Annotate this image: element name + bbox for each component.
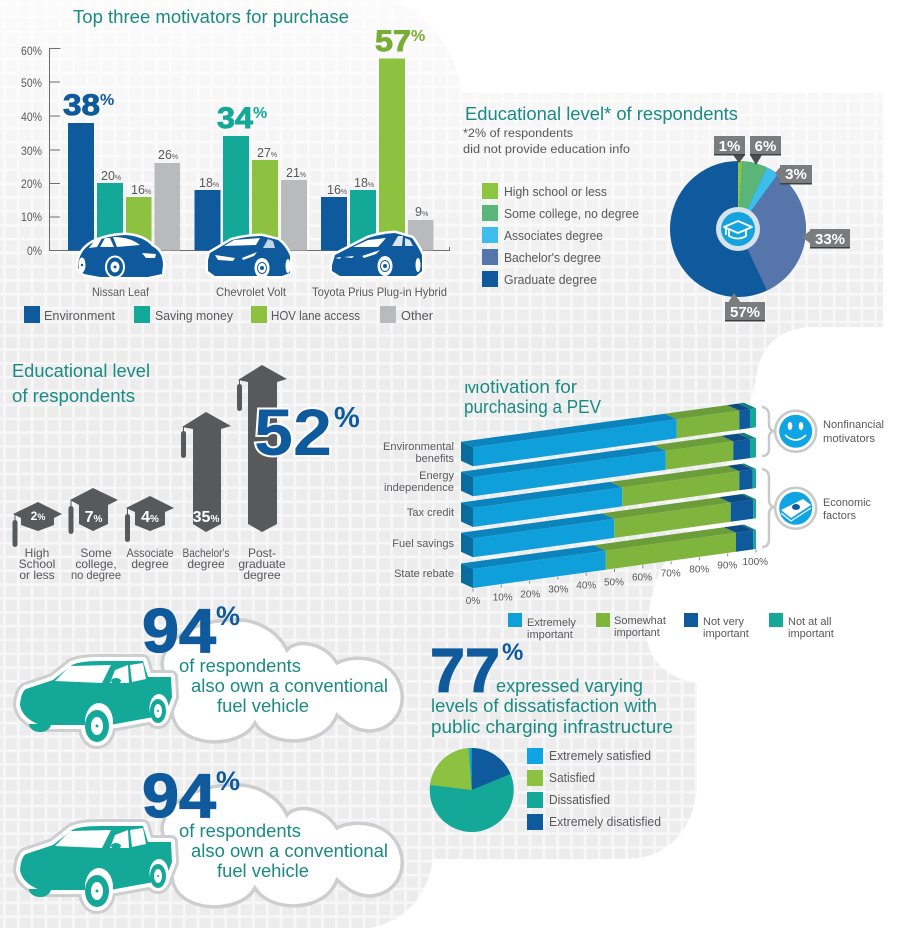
callout: 57% [375,25,425,58]
legend: importance: important [527,629,573,641]
cap labels: degree [243,568,281,582]
panel: motivation for purchasing a PEV [383,377,884,641]
cap labels: School [19,557,55,571]
big number: 94%: 94 [142,762,217,831]
legend: education: High school or less [504,185,607,199]
text: conventional vehicle: fuel vehicle [217,696,309,716]
cap: Bachelor's 35% [181,412,231,532]
row labels: benefits [415,453,454,465]
cap: Post-graduate [237,365,287,532]
row labels: State rebate [394,568,454,580]
bar chart axes: 20% [21,179,42,191]
callout: 38%: 38 [63,89,100,122]
legend: satisfaction [527,748,661,830]
panel: 94% callout one [20,597,402,742]
row labels: Tax credit [407,507,454,519]
percent axis: 100% [743,557,768,568]
callout: 57%: % [411,28,425,45]
big number: 77%: % [502,639,523,666]
footnote [463,128,630,156]
bar chart axes: 60% [21,46,42,58]
bars: Toyota Prius: 18% [354,176,374,190]
heading: educational level of respondents [12,361,150,406]
label: economic factors [823,497,871,522]
cap: Associate 4%: 4% [141,509,159,526]
label: 6%: 6% [755,138,776,155]
icon: smiley [775,411,816,452]
callout: 34%: % [253,105,267,122]
legend: education: Some college, no degree [504,207,639,221]
percent axis: 60% [632,573,652,584]
bars: Chevrolet Volt: 21% [286,166,306,180]
stacked bar: Fuel savings [461,494,756,557]
row labels: Energy [419,470,454,482]
cap labels: Some [80,546,112,560]
row labels: Fuel savings [392,538,454,550]
legend: education: Associates degree [504,229,603,243]
legend: education: Graduate degree [504,273,597,287]
heading: motivation: Motivation for [464,377,577,397]
bars: Chevrolet Volt: 18% [199,176,219,190]
bar chart axes: 10% [21,212,42,224]
heading: educational level of respondents: Educational level [12,361,150,381]
cap labels: degree [187,557,225,571]
cap labels: graduate [238,557,286,571]
heading: educational level of respondents: of respondents [12,386,135,406]
label: nonfinancial motivators: Nonfinancial [823,419,884,431]
callout: 52%: % [334,402,360,434]
text: conventional vehicle: of respondents [179,656,301,676]
stacked bar: Tax credit [461,464,756,527]
bar chart axes: 40% [21,112,42,124]
brace: economic [762,469,775,547]
bars: Chevrolet Volt: 27% [257,146,277,160]
bar chart axes [21,46,450,258]
text: conventional vehicle [179,821,388,881]
cap labels: degree [131,557,169,571]
legend: importance: important [788,628,834,640]
cap: Associate 4% [125,496,174,542]
label: 1%: 1% [719,138,740,155]
bars: Nissan Leaf: 20% [101,169,121,183]
legend: motivators: Saving money [155,309,234,323]
heading: motivation [463,377,601,417]
bar chart axes: 30% [21,146,42,158]
label: economic factors: Economic [823,497,871,509]
bars: Toyota Prius [321,58,434,250]
label: 33%: 33% [815,231,845,248]
legend: importance: important [614,627,660,639]
pie chart: satisfaction [430,748,514,832]
text: dissatisfaction: expressed varying [496,676,643,696]
pie chart: education [670,161,806,297]
title: top three motivators: Top three motivators for purchase [73,7,349,27]
big number: 94%: % [216,601,240,631]
cap: High school 2%: 2% [31,509,45,523]
legend: motivators [24,306,433,323]
cloud [162,785,402,907]
icon: pickup truck [20,661,172,742]
cap labels: Post- [248,546,276,560]
label: economic factors: factors [823,510,856,522]
percent axis: 30% [548,585,568,596]
text: conventional vehicle: also own a conventional [191,841,388,861]
cap: Bachelor's 35%: 35% [193,509,219,526]
panel: top three motivators [21,7,450,323]
bars: Nissan Leaf: 26% [158,148,178,162]
bars: Toyota Prius: 9% [415,205,428,219]
legend: satisfaction: Dissatisfied [549,793,610,807]
panel: 94% callout two [20,762,402,907]
cloud [162,620,402,742]
legend: importance: Extremely [527,617,576,629]
percent axis: 80% [689,565,709,576]
cap labels: or less [19,568,55,582]
panel: 77% dissatisfaction [430,637,673,832]
bar chart axes: 0% [27,246,42,258]
label: 3% [775,165,812,184]
stacked bar: Environmental benefits [461,403,756,466]
callout: 38%: % [100,92,114,109]
text: dissatisfaction: public charging infrastructure [431,717,673,737]
percent axis [466,550,768,607]
text: conventional vehicle: fuel vehicle [217,861,309,881]
text: conventional vehicle: also own a conventional [191,676,388,696]
cap labels: Associate [126,546,174,560]
big number: 94%: % [216,766,240,796]
text: dissatisfaction: levels of dissatisfaction with [431,696,657,716]
legend: importance: Not at all [788,616,831,628]
callout: 34%: 34 [217,102,253,135]
percent axis: 50% [604,577,624,588]
cap labels: college, [75,557,117,571]
label: 57%: 57% [730,304,760,321]
row labels [383,441,454,580]
icon: graduation cap [724,221,752,238]
bar chart axes: 50% [21,78,42,90]
legend: satisfaction: Extremely satisfied [549,749,651,763]
panel: educational level caps [12,361,360,582]
text: conventional vehicle [179,656,388,716]
bars: Chevrolet Volt [194,136,307,250]
cap: Some college 7% [68,488,118,534]
icon: pickup truck [20,826,172,907]
label: 1% [714,136,745,163]
legend: motivators: Other [401,309,433,323]
car names [92,285,447,299]
legend: satisfaction: Satisfied [549,771,595,785]
cap: Some college 7%: 7% [85,509,102,526]
footnote: did not provide education info [463,144,630,156]
callout: 38% [63,89,114,122]
bars: Toyota Prius: 16% [327,183,347,197]
callout: 34% [217,102,267,135]
heading: educational level*: Educational level* of respondents [465,103,738,124]
cap labels: no degree [71,568,121,582]
legend: importance: important [703,628,749,640]
cap labels: High [25,546,49,560]
legend: motivators: HOV lane access [271,309,360,323]
legend: motivators: Environment [44,309,116,323]
legend: satisfaction: Extremely disatisfied [549,815,661,829]
percent axis: 0% [466,596,480,607]
label: 33% [802,229,850,248]
car names: Chevrolet Volt [216,285,287,299]
label: nonfinancial motivators: motivators [823,433,875,445]
cap labels [19,546,286,582]
bars: Nissan Leaf [68,123,180,250]
text: conventional vehicle: of respondents [179,821,301,841]
stacked bar: State rebate [461,525,756,588]
legend: education [482,183,639,287]
label: nonfinancial motivators [823,419,884,445]
percent axis: 40% [576,581,596,592]
callout: 57%: 57 [375,25,411,58]
icon: Chevrolet Volt car [208,236,290,278]
icon: money stack [775,488,816,529]
percent axis: 70% [661,569,681,580]
legend: education: Bachelor's degree [504,251,601,265]
cap: High school 2% [12,502,62,547]
car names: Toyota Prius Plug-in Hybrid [312,285,447,299]
car names: Nissan Leaf [92,285,150,299]
callout: 52%: 52 [254,395,332,469]
big number: 94%: 94 [142,597,217,666]
stacked bar: Energy independence [461,433,756,496]
percent axis: 20% [520,590,540,601]
row labels: Environmental [383,441,454,453]
legend: importance: Not very [703,616,744,628]
bars: Nissan Leaf: 16% [131,183,151,197]
callout: 52% [254,395,360,469]
percent axis: 90% [717,561,737,572]
percent axis: 10% [493,593,513,604]
icon: Toyota Prius car [332,233,422,276]
big number: 77%: 77 [430,637,500,706]
row labels: independence [384,482,454,494]
label: 3%: 3% [785,166,807,183]
legend: importance: Somewhat [614,615,666,627]
cap labels: Bachelor's [182,546,230,560]
label: 6% [750,136,781,165]
footnote: *2% of respondents [463,128,573,140]
legend: importance [508,613,834,641]
brace: nonfinancial [762,407,775,456]
panel: educational level pie [463,103,850,322]
heading: motivation: purchasing a PEV [464,397,601,417]
icon: Nissan Leaf car [78,235,163,278]
label: 57% [725,293,765,322]
text: dissatisfaction [431,676,673,737]
